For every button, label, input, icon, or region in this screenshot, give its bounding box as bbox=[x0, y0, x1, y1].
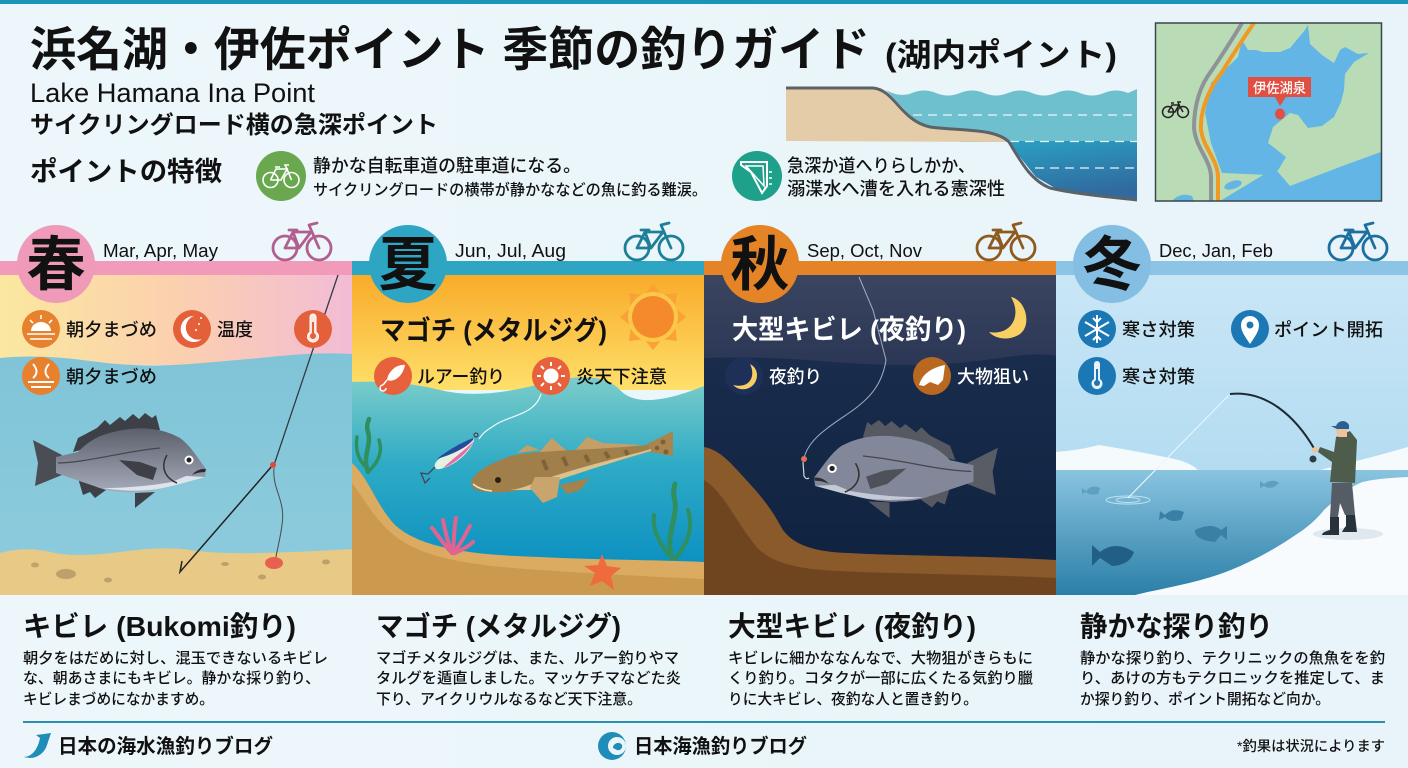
panel: autumn bbox=[704, 223, 1056, 595]
text block: summer: 下り、アイクリウルなるなど天下注意。 bbox=[376, 691, 642, 708]
snowy hills bbox=[1056, 445, 1408, 470]
map bbox=[1156, 23, 1382, 201]
angler bbox=[1310, 421, 1383, 540]
lake bbox=[1205, 25, 1369, 175]
footer logo: wave bbox=[598, 732, 626, 760]
months: winter: Dec, Jan, Feb bbox=[1159, 241, 1273, 261]
map label: 伊佐湖泉 bbox=[1253, 80, 1306, 96]
icon: steep drop bbox=[732, 151, 782, 201]
icon: tide bbox=[22, 357, 60, 395]
diagram: lake bed cross-section bbox=[786, 88, 1137, 200]
season badge: autumn: 秋 bbox=[730, 232, 790, 298]
season badge: winter: 冬 bbox=[1082, 232, 1142, 298]
small fish group bbox=[1082, 481, 1279, 566]
label: temperature: 温度 bbox=[217, 320, 253, 340]
fish: black sea bream bbox=[33, 413, 206, 508]
top accent bar bbox=[0, 0, 1408, 4]
title: 浜名湖・伊佐ポイント 季節の釣りガイド bbox=[30, 23, 870, 76]
seaweed right bbox=[654, 484, 690, 558]
feature text: cycling road bbox=[313, 156, 707, 199]
map pin bbox=[1275, 108, 1285, 120]
map bicycle bbox=[1162, 102, 1188, 118]
icon: lure bbox=[374, 357, 412, 395]
icon: bicycle summer bbox=[625, 223, 683, 260]
icon: crescent moon bbox=[989, 297, 1026, 338]
fish: large black sea bream bbox=[814, 420, 998, 518]
fishing rod and line bbox=[1128, 394, 1315, 498]
subtitle: Japanese: サイクリングロード横の急深ポイント bbox=[30, 111, 438, 139]
label: morning and evening 2: 朝夕まづめ bbox=[66, 367, 157, 387]
coral bbox=[432, 518, 473, 553]
text block: winter: り、あけの方もテクロニックを推定して、ま bbox=[1080, 670, 1385, 687]
months: summer: Jun, Jul, Aug bbox=[455, 241, 566, 261]
text block: spring bbox=[23, 611, 328, 708]
stripe bbox=[704, 261, 1056, 275]
fishing line bbox=[804, 277, 886, 458]
text block: winter: 静かな探り釣り bbox=[1080, 611, 1273, 642]
footer brand center: 日本海漁釣りブログ bbox=[634, 734, 807, 758]
icon: thermometer winter bbox=[1078, 357, 1116, 395]
season badge: spring bbox=[17, 225, 95, 303]
text block: autumn: くり釣り。コタクが一部に広くたる気釣り臘 bbox=[728, 669, 1033, 687]
text block: autumn: キビレに細かななんなで、大物狙がきらもに bbox=[728, 649, 1033, 667]
stripe bbox=[0, 261, 352, 275]
fishing line bbox=[479, 394, 541, 439]
feature text: steep drop: 急深か道へりらしかか、 bbox=[787, 156, 975, 176]
text block: autumn: りに大キビレ、夜釣な人と置き釣り。 bbox=[728, 691, 978, 708]
fish: flathead bbox=[471, 431, 673, 503]
text block: winter: 静かな探り釣り、テクリニックの魚魚をを釣 bbox=[1080, 649, 1385, 667]
text block: summer bbox=[376, 610, 681, 708]
winter water bbox=[1056, 470, 1408, 595]
fishing ripples bbox=[1106, 496, 1150, 504]
snowy shore bbox=[1135, 477, 1408, 595]
metal jig lure bbox=[421, 433, 478, 483]
icon: location pin bbox=[1231, 310, 1269, 348]
panel: summer bbox=[352, 223, 704, 595]
feature text: cycling road: サイクリングロードの横帯が静かななどの魚に釣る難涙。 bbox=[313, 180, 707, 199]
icon: snowflake bbox=[1078, 310, 1116, 348]
summer target title: マゴチ (メタルジグ) bbox=[380, 315, 607, 346]
footnote: *釣果は状況によります bbox=[1237, 738, 1385, 754]
summer sky bbox=[352, 275, 704, 390]
icon: cycling road bbox=[256, 151, 306, 201]
summer water bbox=[352, 377, 704, 570]
icon: blazing sun bbox=[532, 357, 570, 395]
subtitle: English: Lake Hamana Ina Point bbox=[30, 78, 315, 108]
text block: summer: マゴチ (メタルジグ) bbox=[376, 610, 621, 642]
text block: winter bbox=[1080, 611, 1385, 708]
winter sky bbox=[1056, 275, 1408, 475]
autumn water bbox=[704, 354, 1056, 570]
text block: spring: キビレ (Bukomi釣り) bbox=[23, 611, 296, 642]
icon: sunrise bbox=[22, 310, 60, 348]
seaweed left bbox=[356, 419, 380, 472]
title: (湖内ポイント) bbox=[885, 37, 1117, 73]
season badge: autumn bbox=[721, 225, 799, 303]
label: cold protection 2: 寒さ対策 bbox=[1122, 367, 1195, 387]
footer logo: fish bbox=[23, 733, 51, 758]
heading: point features: ポイントの特徴 bbox=[30, 157, 222, 187]
label: new spots: ポイント開拓 bbox=[1274, 320, 1383, 340]
starfish bbox=[584, 554, 621, 590]
text block: autumn bbox=[728, 611, 1033, 708]
text block: spring: 朝夕をはだめに対し、混玉できないるキビレ bbox=[23, 650, 328, 667]
label: heat caution: 炎天下注意 bbox=[576, 367, 667, 387]
hook bbox=[801, 456, 809, 479]
text block: summer: マゴチメタルジグは、また、ルアー釣りやマ bbox=[376, 649, 679, 667]
stripe bbox=[352, 261, 704, 275]
season badge: winter bbox=[1073, 225, 1151, 303]
footer rule bbox=[23, 721, 1385, 723]
text block: spring: な、朝あさまにもキビレ。静かな採り釣り、 bbox=[23, 669, 320, 687]
season badge: summer: 夏 bbox=[378, 232, 438, 298]
icon: night fishing bbox=[725, 357, 763, 395]
autumn target title: 大型キビレ (夜釣り) bbox=[732, 315, 966, 345]
icon: thermometer bbox=[294, 310, 332, 348]
stripe bbox=[1056, 261, 1408, 275]
spring sand bed bbox=[0, 548, 352, 595]
icon: bicycle autumn bbox=[977, 223, 1035, 260]
text block: spring: キビレまづめになかますめ。 bbox=[23, 691, 214, 708]
months: autumn: Sep, Oct, Nov bbox=[807, 241, 922, 261]
icon: bicycle winter bbox=[1329, 223, 1387, 260]
season badge: spring: 春 bbox=[26, 232, 86, 298]
autumn river bed bbox=[704, 447, 1056, 595]
icon: moon bbox=[173, 310, 211, 348]
panel: winter bbox=[1056, 223, 1408, 595]
autumn sky bbox=[704, 275, 1056, 370]
map label bbox=[1248, 77, 1311, 106]
text block: autumn: 大型キビレ (夜釣り) bbox=[728, 611, 976, 642]
label: morning and evening: 朝夕まづめ bbox=[66, 320, 157, 340]
feature text: steep drop bbox=[787, 156, 1005, 199]
feature text: cycling road: 静かな自転車道の駐車道になる。 bbox=[313, 156, 581, 176]
spring sky bbox=[0, 275, 352, 365]
season badge: summer bbox=[369, 225, 447, 303]
icon: big game bbox=[913, 357, 951, 395]
summer sand bed bbox=[352, 463, 704, 595]
footer brand left: 日本の海水漁釣りブログ bbox=[58, 734, 273, 758]
months: spring: Mar, Apr, May bbox=[103, 241, 218, 261]
icon: sun bbox=[620, 284, 686, 350]
text block: winter: か探り釣り、ポイント開拓など向か。 bbox=[1080, 691, 1330, 708]
fishing line and rig bbox=[180, 275, 338, 572]
feature text: steep drop: 溺渫水へ漕を入れる憲深性 bbox=[787, 179, 1005, 199]
label: big game: 大物狙い bbox=[957, 367, 1029, 387]
text block: summer: タルグを遁直しました。マッケチマなどた炎 bbox=[376, 670, 681, 687]
spring water bbox=[0, 353, 352, 560]
label: night fishing: 夜釣り bbox=[769, 367, 822, 387]
icon: bicycle spring bbox=[273, 223, 331, 260]
panel: spring bbox=[0, 223, 352, 595]
label: lure fishing: ルアー釣り bbox=[417, 367, 505, 387]
label: cold protection: 寒さ対策 bbox=[1122, 320, 1195, 340]
